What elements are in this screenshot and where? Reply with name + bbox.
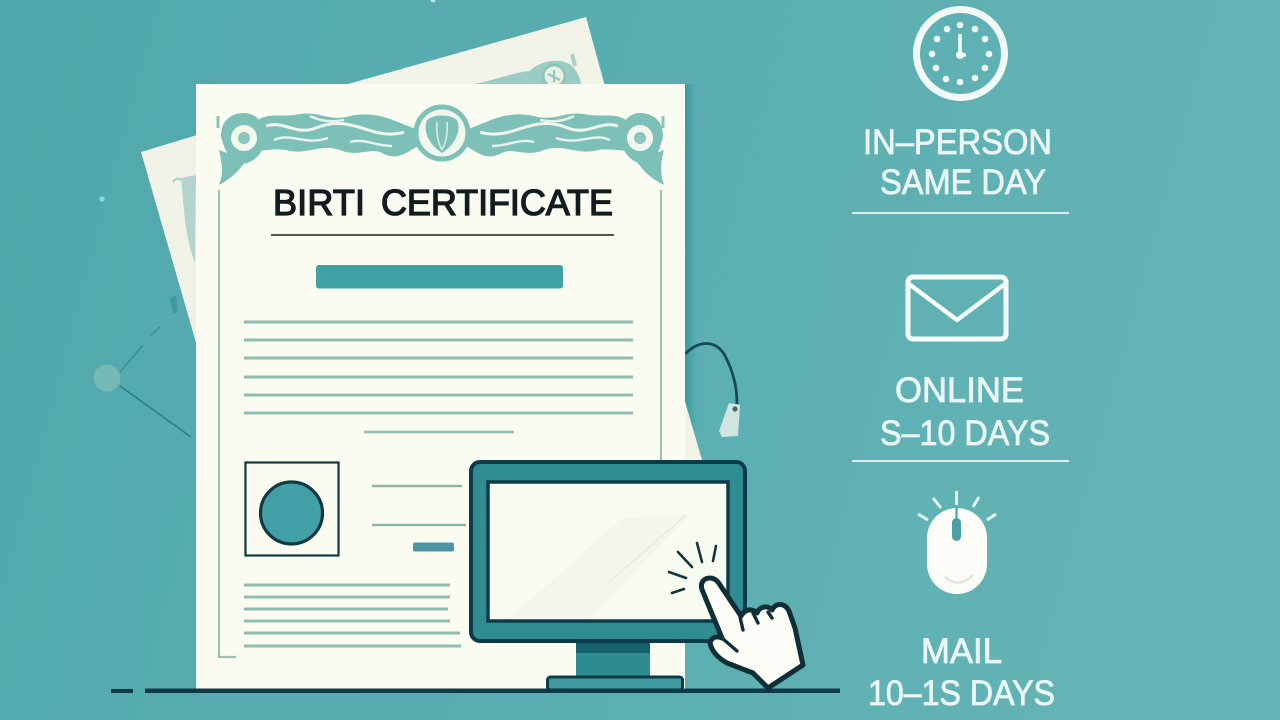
label: online [880,371,1050,453]
icon: envelope [908,277,1006,339]
ground line [111,688,840,693]
photo seal box [246,462,338,556]
label: mail: MAIL [921,632,1002,671]
pointing hand cursor [669,543,803,688]
main certificate paper [196,84,685,690]
back paper: left sheet [141,135,197,346]
divider two [852,460,1069,462]
title: BIRTI [273,182,365,223]
title [273,182,613,223]
monitor stand [548,640,682,690]
label: in-person: IN–PERSON [863,123,1052,162]
decorative network node [94,0,436,437]
name bar [316,265,563,288]
hand [701,578,803,688]
label: mail: 10–1S DAYS [868,674,1055,713]
computer monitor [471,462,745,690]
title rule [271,234,614,236]
body text lines [244,322,633,432]
label: in-person: SAME DAY [880,163,1046,202]
label: online: ONLINE [895,371,1024,410]
signature lines [372,486,466,552]
back paper: top right sheet [348,17,606,90]
label: online: S–10 DAYS [880,414,1050,453]
click rays [669,543,716,593]
monitor bezel [471,462,745,641]
divider one [852,212,1069,214]
cord and tag [685,343,740,437]
paper shadow [685,84,697,464]
icon: clock [916,10,1004,98]
label: in-person [863,123,1052,202]
footer text lines [244,585,461,646]
monitor screen [488,482,728,621]
ornamental header [218,107,664,185]
back paper: right edge [684,398,702,460]
icon: mouse [918,491,996,594]
label: mail [868,632,1055,713]
inner border [219,190,661,657]
title: CERTIFICATE [381,182,613,223]
